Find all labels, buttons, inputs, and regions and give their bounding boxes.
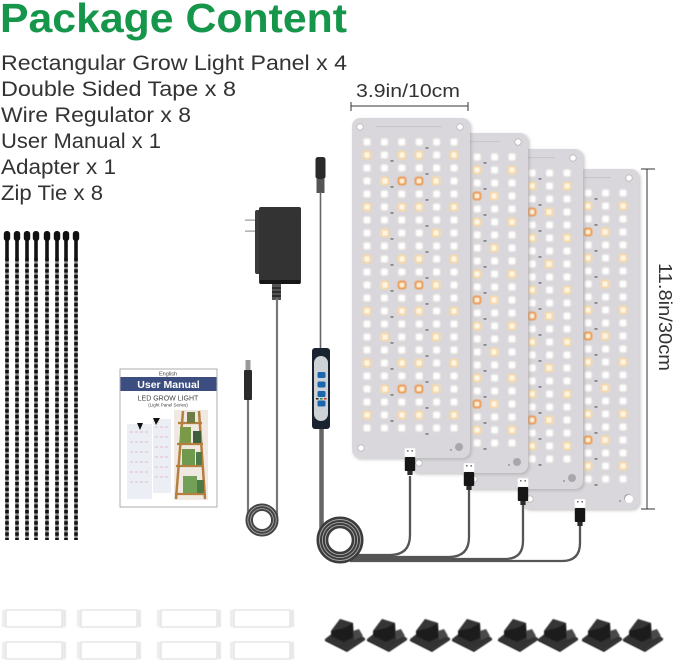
top connector and cable bbox=[316, 157, 326, 348]
dimmer controller bbox=[312, 348, 330, 429]
manual language: English bbox=[159, 372, 177, 378]
double sided tape bbox=[2, 610, 294, 659]
usb cables bbox=[350, 476, 580, 561]
cable clips bbox=[325, 619, 663, 652]
DC barrel plug bbox=[244, 360, 252, 400]
manual shelf photo bbox=[174, 410, 208, 500]
controller coil and cable bbox=[320, 428, 360, 560]
zip ties bbox=[4, 231, 79, 540]
manual subtitle bbox=[138, 396, 199, 408]
power adapter bbox=[245, 207, 301, 300]
manual subtitle: (Light Panel Series) bbox=[148, 402, 188, 408]
contents list: Zip Tie x 8 bbox=[1, 182, 103, 205]
panel 3 bbox=[465, 149, 583, 489]
manual panels illustration bbox=[127, 418, 171, 499]
contents list: Rectangular Grow Light Panel x 4 bbox=[1, 52, 347, 75]
height dimension: 11.8in/30cm bbox=[655, 263, 676, 371]
contents list: User Manual x 1 bbox=[1, 130, 161, 153]
width dimension: 3.9in/10cm bbox=[356, 80, 460, 101]
panel 1 bbox=[352, 118, 470, 458]
panel 2 bbox=[410, 133, 528, 473]
contents list: Double Sided Tape x 8 bbox=[1, 78, 236, 101]
usb connectors bbox=[404, 448, 586, 526]
panel 4 bbox=[521, 169, 639, 509]
light panels bbox=[352, 118, 639, 509]
user manual bbox=[120, 369, 217, 507]
width dimension bbox=[351, 80, 468, 111]
prongs bbox=[245, 220, 259, 232]
contents list: Wire Regulator x 8 bbox=[1, 104, 191, 127]
contents list: Adapter x 1 bbox=[1, 156, 116, 179]
adapter cable and coil bbox=[248, 298, 277, 534]
manual header: User Manual bbox=[137, 379, 200, 391]
contents list bbox=[1, 52, 347, 205]
manual subtitle: LED GROW LIGHT bbox=[138, 396, 199, 402]
